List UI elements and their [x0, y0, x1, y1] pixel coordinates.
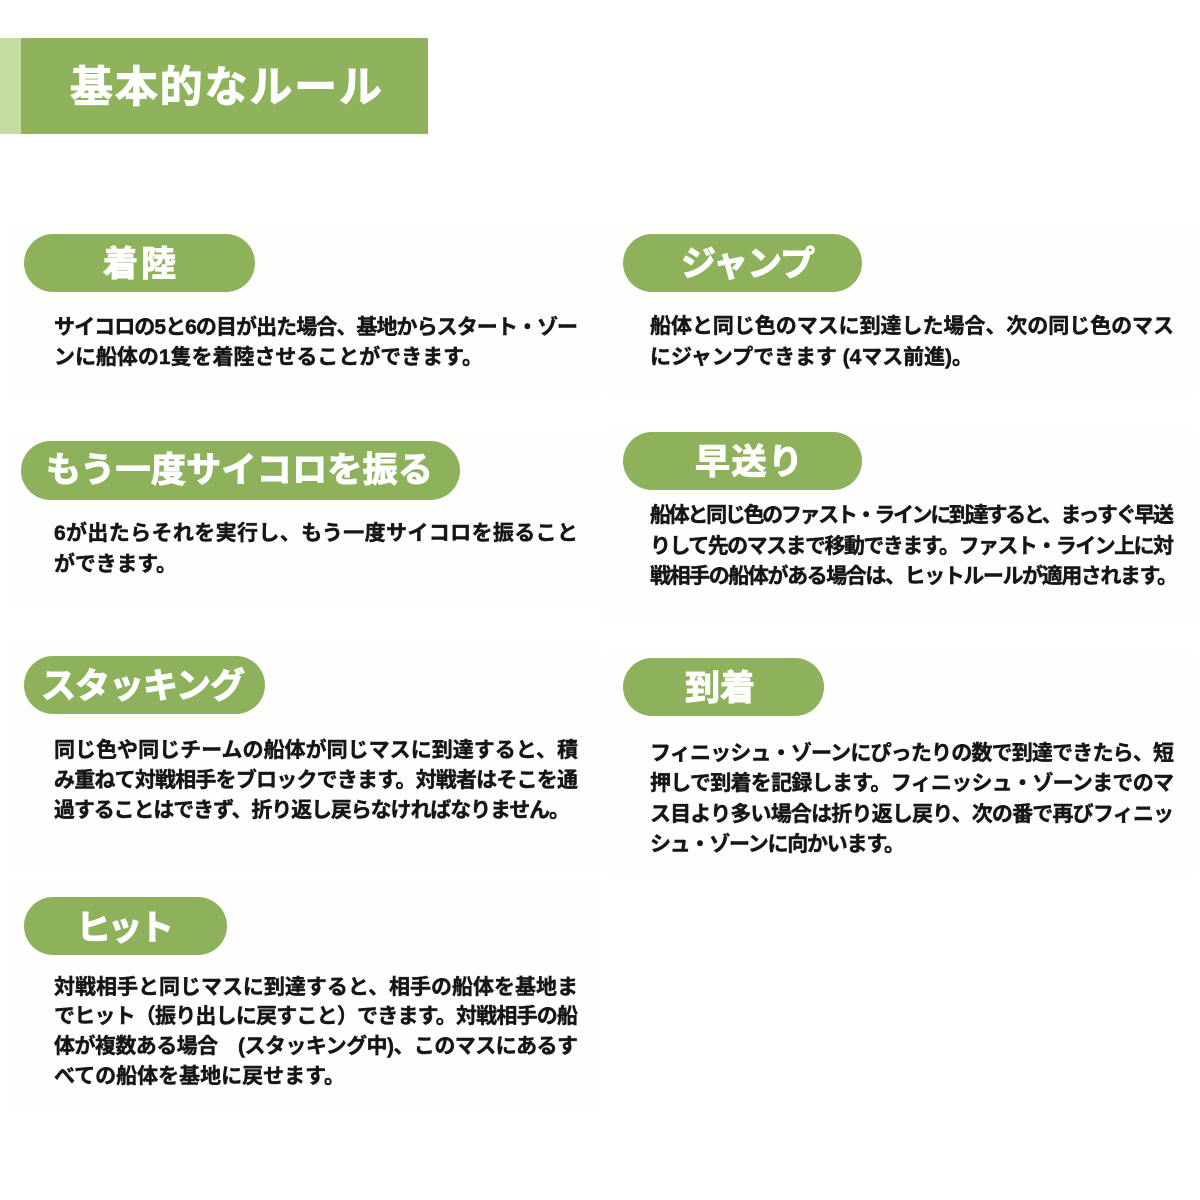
heading: 着陸: 着陸 — [103, 245, 176, 284]
panel: スタッキング — [24, 656, 578, 822]
text block: ヒット: でヒット（振り出しに戻すこと）できます。対戦相手の船 — [54, 1005, 578, 1028]
text block: 着陸 — [54, 315, 578, 369]
panel: ヒット — [24, 897, 578, 1088]
text block: 着陸: サイコロの5と6の目が出た場合、基地からスタート・ゾー — [54, 315, 578, 339]
title: 基本的なルール — [70, 64, 382, 112]
text block: 到着: シュ・ゾーンに向かいます。 — [650, 833, 905, 856]
heading: 早送り: 早送り — [695, 443, 803, 482]
text block: 着陸: ンに船体の1隻を着陸させることができます。 — [54, 345, 483, 369]
heading: もう一度サイコロを振る — [21, 441, 460, 500]
heading: 早送り — [623, 432, 862, 490]
panel: もう一度サイコロを振る — [21, 441, 578, 576]
text block: 到着: 押しで到着を記録します。フィニッシュ・ゾーンまでのマ — [650, 772, 1174, 795]
text block: スタッキング: 過することはできず、折り返し戻らなければなりません。 — [54, 799, 570, 822]
panel: ジャンプ — [623, 234, 1174, 369]
text block: 早送り: りして先のマスまで移動できます。ファスト・ライン上に対 — [650, 535, 1174, 558]
text block: 到着: フィニッシュ・ゾーンにぴったりの数で到達できたら、短 — [650, 742, 1174, 765]
text block: 早送り — [650, 504, 1178, 588]
text block: ヒット: 体が複数ある場合 (スタッキング中)、このマスにあるす — [54, 1034, 578, 1058]
text block: もう一度サイコロを振る: 6が出たらそれを実行し、もう一度サイコロを振ること — [54, 521, 578, 545]
text block: もう一度サイコロを振る: ができます。 — [54, 552, 177, 576]
text block: 早送り: 戦相手の船体がある場合は、ヒットルールが適用されます。 — [650, 564, 1178, 588]
panel: 早送り — [623, 432, 1178, 588]
text block: 早送り: 船体と同じ色のファスト・ラインに到達すると、まっすぐ早送 — [650, 504, 1174, 527]
text block: ジャンプ: にジャンプできます (4マス前進)。 — [650, 346, 973, 369]
heading: ジャンプ — [623, 234, 862, 292]
text block: もう一度サイコロを振る — [54, 521, 578, 576]
text block: 到着 — [650, 742, 1174, 856]
heading: もう一度サイコロを振る: もう一度サイコロを振る — [46, 451, 433, 490]
heading: ヒット: ヒット — [76, 909, 174, 948]
heading: ジャンプ: ジャンプ — [681, 245, 815, 284]
text block: ジャンプ: 船体と同じ色のマスに到達した場合、次の同じ色のマス — [650, 315, 1174, 338]
title banner — [0, 38, 428, 134]
panel: 着陸 — [24, 234, 578, 369]
text block: スタッキング — [54, 738, 578, 822]
heading: スタッキング: スタッキング — [41, 667, 245, 706]
text block: ヒット — [54, 976, 578, 1088]
text block: ジャンプ — [650, 315, 1174, 369]
text block: 到着: ス目より多い場合は折り返し戻り、次の番で再びフィニッ — [650, 803, 1174, 826]
heading: 到着 — [623, 658, 824, 716]
text block: スタッキング: 同じ色や同じチームの船体が同じマスに到達すると、積 — [54, 738, 578, 762]
heading: スタッキング — [24, 656, 265, 714]
text block: ヒット: 対戦相手と同じマスに到達すると、相手の船体を基地ま — [54, 976, 578, 999]
panel: 到着 — [623, 658, 1174, 856]
heading: 到着: 到着 — [685, 669, 755, 708]
text block: ヒット: べての船体を基地に戻せます。 — [54, 1065, 345, 1088]
heading: 着陸 — [24, 234, 255, 292]
text block: スタッキング: み重ねて対戦相手をブロックできます。対戦者はそこを通 — [54, 768, 578, 792]
heading: ヒット — [24, 897, 227, 955]
